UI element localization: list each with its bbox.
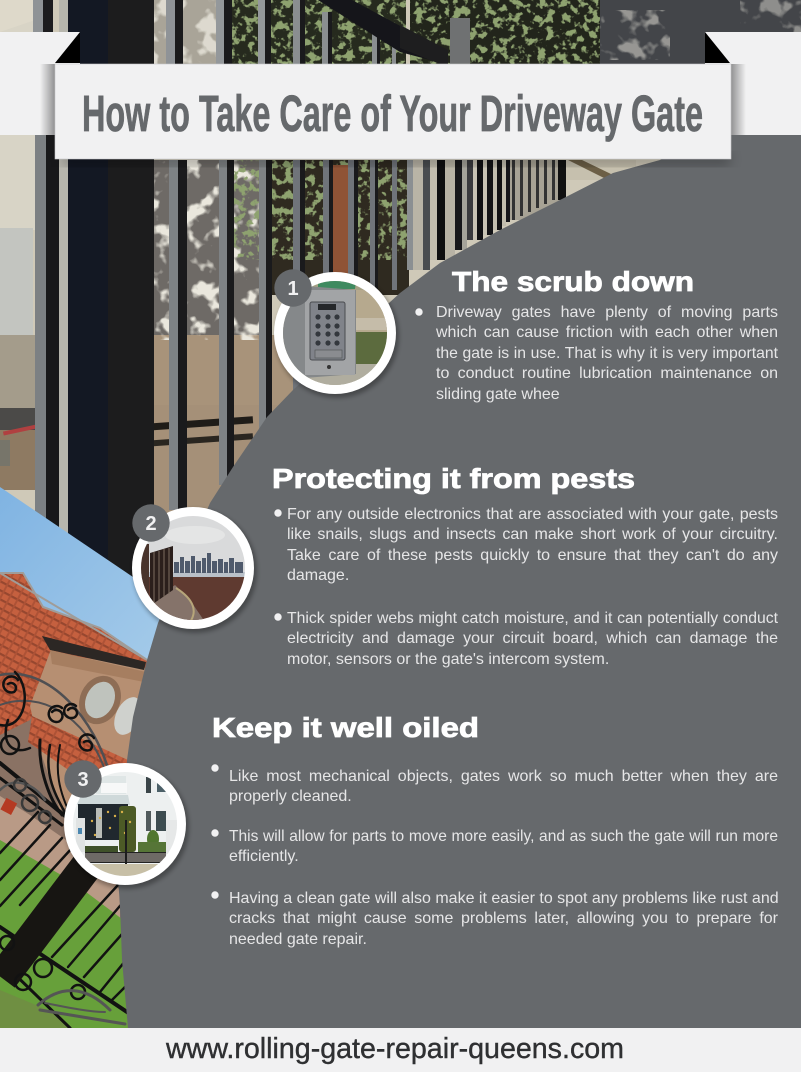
text: oiled paragraph one bbox=[229, 768, 778, 805]
badge 1: 1 bbox=[287, 278, 299, 300]
badge 3: 3 bbox=[77, 769, 89, 791]
text: oiled paragraph two: This will allow for parts to move more easily, and as such the gate will run more bbox=[229, 828, 778, 845]
fence posts and bars bbox=[33, 0, 636, 600]
curb bbox=[0, 796, 120, 925]
text: oiled paragraph three: cracks that might cause some problems later, allowing you to prepare for bbox=[229, 910, 778, 927]
banner shadow bbox=[62, 152, 730, 166]
background photo: house with ornate wrought-iron gate bbox=[0, 487, 160, 1028]
text: scrub down paragraph: which can cause friction with each other when bbox=[436, 324, 778, 341]
text: scrub down paragraph bbox=[436, 304, 778, 403]
right ribbon tail bbox=[705, 32, 801, 135]
roof bbox=[0, 573, 150, 735]
lower roof band bbox=[28, 716, 127, 769]
house wall bbox=[30, 652, 146, 810]
footer url: www.rolling-gate-repair-queens.com bbox=[165, 1033, 624, 1065]
badge 2 bbox=[132, 504, 170, 542]
text: oiled paragraph two: efficiently. bbox=[229, 848, 299, 865]
text: pests paragraph one bbox=[287, 506, 778, 584]
text: scrub down paragraph: to conduct routine lubrication maintenance on bbox=[436, 365, 778, 382]
text: scrub down paragraph: the gate is in use. That is why it is very important bbox=[436, 345, 778, 362]
text: pests paragraph two: electricity and damage your circuit board, which can damage the bbox=[287, 630, 778, 647]
grass bbox=[0, 840, 130, 1030]
step 2 circle: open gate and skyline photo bbox=[132, 507, 257, 633]
text: oiled paragraph three: Having a clean gate will also make it easier to spot any problems like rust and bbox=[229, 890, 779, 907]
left ribbon tail bbox=[0, 32, 80, 135]
text: pests paragraph two: Thick spider webs might catch moisture, and it can potentially conduct bbox=[287, 610, 778, 627]
text: pests paragraph one: For any outside electronics that are associated with your gate, pests bbox=[287, 506, 778, 523]
badge 1 bbox=[274, 269, 312, 307]
text: oiled paragraph three: needed gate repair. bbox=[229, 931, 367, 948]
badge 3 bbox=[64, 760, 102, 798]
text: oiled paragraph one: properly cleaned. bbox=[229, 788, 352, 805]
text: oiled paragraph one: Like most mechanical objects, gates work so much better when they are bbox=[229, 768, 778, 785]
badge 2: 2 bbox=[145, 513, 157, 535]
heading: keep it well oiled: Keep it well oiled bbox=[212, 712, 479, 743]
text: pests paragraph two: motor, sensors or the gate's intercom system. bbox=[287, 651, 609, 668]
text: pests paragraph one: like snails, slugs and insects can make short work of your circuitry. bbox=[287, 526, 778, 543]
text: pests paragraph one: Take care of these pests quickly to ensure that they can't do any bbox=[287, 547, 778, 564]
text: scrub down paragraph: Driveway gates have plenty of moving parts bbox=[436, 304, 778, 321]
text: pests paragraph one: damage. bbox=[287, 567, 349, 584]
text: oiled paragraph two bbox=[229, 828, 778, 865]
step 1 circle: keypad photo bbox=[274, 272, 399, 398]
windows bbox=[79, 676, 121, 724]
heading: protecting it from pests: Protecting it from pests bbox=[272, 463, 635, 494]
step 3 circle: white house and gate photo bbox=[64, 763, 189, 889]
heading: the scrub down: The scrub down bbox=[452, 266, 694, 297]
background photo: iron driveway gate against a wall bbox=[0, 0, 801, 600]
iron gate rails and pickets bbox=[0, 672, 130, 1028]
text: pests paragraph two bbox=[287, 610, 778, 668]
bullets bbox=[211, 308, 423, 899]
text: scrub down paragraph: sliding gate whee bbox=[436, 386, 560, 403]
panel: grey content background bbox=[119, 135, 801, 1028]
title banner bbox=[55, 64, 731, 159]
text: oiled paragraph three bbox=[229, 890, 779, 948]
footer strip bbox=[0, 1028, 801, 1072]
